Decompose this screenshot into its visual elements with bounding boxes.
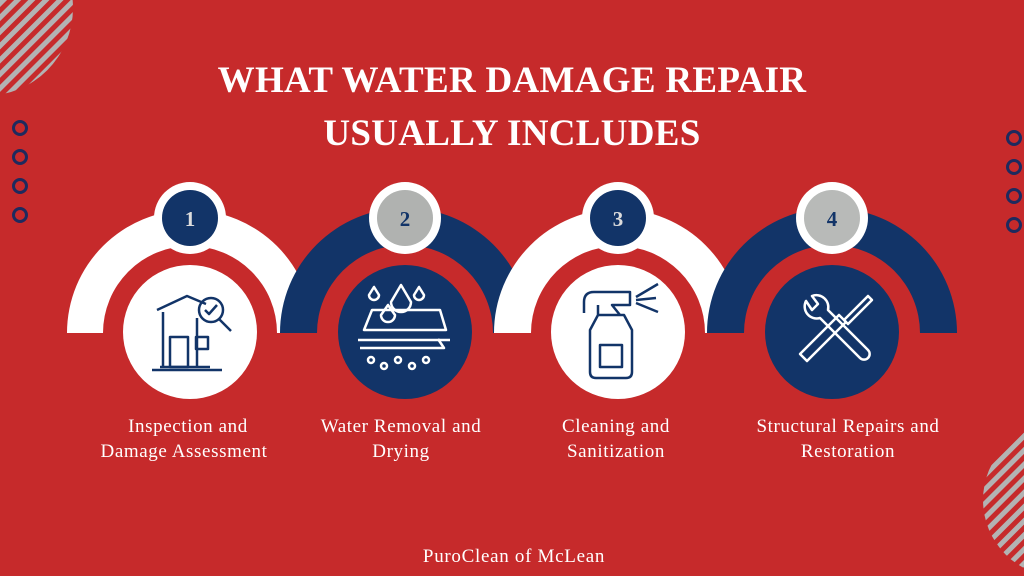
labels: Drying <box>372 441 430 462</box>
labels <box>101 416 940 462</box>
icon: water drying <box>358 285 450 369</box>
labels: Restoration <box>801 441 895 462</box>
labels: Inspection and <box>128 416 248 437</box>
arc 3 <box>494 209 742 333</box>
arc 4 <box>707 208 957 333</box>
icon: spray bottle <box>584 284 658 378</box>
icon circle 4 <box>765 265 899 399</box>
icon circle 2 <box>338 265 472 399</box>
labels: Sanitization <box>567 441 665 462</box>
step 2 <box>280 182 530 399</box>
decor: right rings <box>1008 132 1020 232</box>
labels: Structural Repairs and <box>756 416 940 437</box>
icon: wrench and screwdriver <box>800 295 872 361</box>
decor: striped circle top-left <box>0 0 73 96</box>
icon circle 1 <box>123 265 257 399</box>
labels: Water Removal and <box>321 416 481 437</box>
arc 2 <box>280 208 530 333</box>
labels: Cleaning and <box>562 416 670 437</box>
icon circle 3 <box>551 265 685 399</box>
number badge 1 <box>154 182 226 254</box>
number badge 2 <box>369 182 441 254</box>
text: USUALLY INCLUDES <box>323 113 701 154</box>
step 3: 3 <box>613 207 623 231</box>
step 4: 4 <box>827 207 838 231</box>
decor: striped circle bottom-right <box>983 423 1024 576</box>
footer: PuroClean of McLean <box>423 546 605 567</box>
step 4 <box>707 182 957 399</box>
number badge 4 <box>796 182 868 254</box>
step 3 <box>494 182 742 399</box>
step 1 <box>67 182 313 399</box>
step 2: 2 <box>400 207 410 231</box>
number badge 3 <box>582 182 654 254</box>
title: WHAT WATER DAMAGE REPAIR <box>218 60 807 101</box>
arc 1 <box>67 210 313 333</box>
labels: Damage Assessment <box>101 441 268 462</box>
icon: house inspection <box>152 296 231 370</box>
step 1: 1 <box>185 207 195 231</box>
decor: left rings <box>14 122 26 222</box>
